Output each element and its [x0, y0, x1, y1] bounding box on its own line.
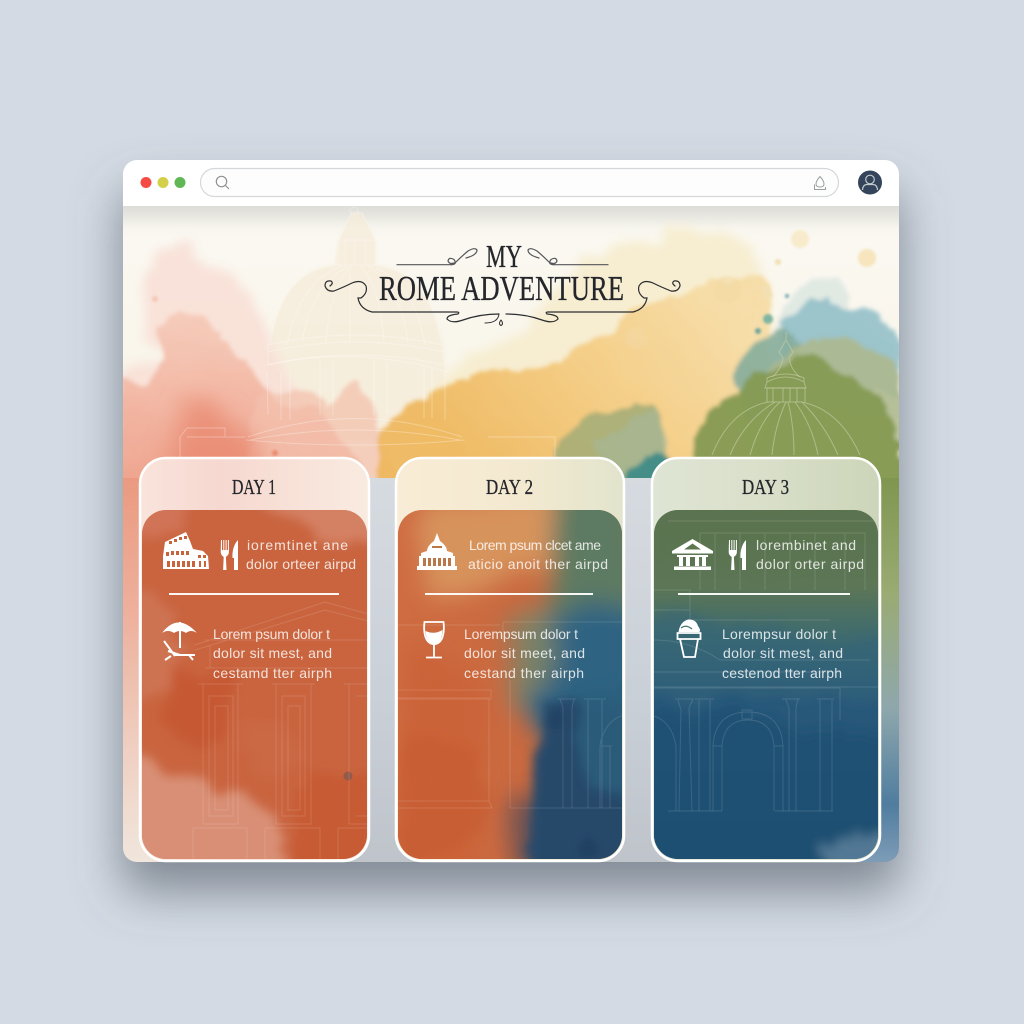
text: second activity [213, 626, 332, 681]
text: second activity: Lorem psum dolor t [213, 626, 330, 642]
card 1 header background [140, 458, 369, 861]
text: first activity [756, 537, 864, 572]
deep coral wash [164, 390, 270, 457]
icon: upload [814, 176, 826, 190]
line art: St Peter's dome [180, 207, 555, 478]
text: second activity [722, 626, 843, 681]
window control dots [140, 177, 186, 188]
card 3 painted panel [654, 510, 878, 859]
search bar [200, 168, 838, 196]
icon: basilica [417, 533, 457, 570]
divider [678, 593, 850, 595]
text: first activity [468, 537, 608, 572]
icon: search [216, 176, 229, 189]
icon: wine glass [424, 622, 444, 658]
card 1 painted panel [142, 510, 367, 859]
text: second activity: cestamd tter airph [213, 665, 332, 681]
panel: day 2 card [394, 456, 626, 862]
card 2 heading: DAY 2 [486, 475, 533, 499]
panel: day 3 card [650, 456, 882, 862]
divider [425, 593, 593, 595]
line art: green dome [712, 332, 860, 455]
text: second activity: dolor sit mest, and [723, 645, 843, 661]
browser window [120, 160, 905, 862]
pale green wash [768, 335, 899, 446]
icon: fork and knife [729, 540, 746, 570]
icon: beach umbrella and lounger [162, 622, 197, 660]
text: first activity: aticio anoit ther airpd [468, 556, 608, 572]
ornamental flourishes [325, 249, 680, 326]
pale teal wash [777, 276, 850, 327]
green left wash [552, 401, 668, 478]
blue wash [785, 303, 905, 400]
text: first activity: Lorem psum clcet ame [469, 537, 601, 553]
card 3 heading: DAY 3 [742, 475, 789, 499]
lower window area [123, 478, 899, 862]
icon: temple [672, 539, 713, 570]
line art: arches and columns [654, 521, 880, 811]
text: first activity: dolor orteer airpd [246, 556, 356, 572]
card 3 header background [652, 458, 880, 861]
text: second activity [464, 626, 585, 681]
title: ROME ADVENTURE: ROME ADVENTURE [379, 269, 624, 308]
text: first activity: ioremtinet ane [247, 537, 348, 553]
text: second activity: Lorempsur dolor t [722, 626, 836, 642]
text: first activity: lorembinet and [756, 537, 856, 553]
title block [325, 238, 680, 326]
text: first activity: dolor orter airpd [756, 556, 864, 572]
text: second activity: cestenod tter airph [722, 665, 842, 681]
teal wash [730, 326, 802, 393]
icon: ice cream cup [678, 619, 700, 657]
panel: day 1 card [138, 456, 370, 862]
orange-yellow wash [374, 273, 774, 478]
hero watercolor background [120, 206, 905, 500]
card 1 heading: DAY 1 [232, 475, 276, 499]
icon: colosseum [163, 532, 209, 569]
window shadow [122, 190, 900, 892]
divider [169, 593, 339, 595]
line art: columns and arch [398, 622, 624, 808]
paint droplets [152, 230, 876, 456]
mid salmon wash [123, 310, 361, 478]
card 2 painted panel [398, 510, 622, 859]
text: first activity [246, 537, 356, 572]
deep teal corner [624, 450, 670, 478]
line art: temple columns [193, 602, 372, 862]
card 2 header background [396, 458, 624, 861]
browser top bar [123, 160, 899, 206]
text: second activity: dolor sit mest, and [213, 645, 332, 661]
text: second activity: dolor sit meet, and [464, 645, 585, 661]
title: MY: MY [486, 238, 522, 274]
icon: fork and knife [221, 540, 238, 570]
cream dome silhouette [272, 214, 444, 428]
pale salmon wash [123, 240, 292, 394]
olive wash [690, 352, 899, 478]
text: second activity: cestand ther airph [464, 665, 584, 681]
icon: user avatar [858, 170, 882, 194]
pale yellow wash [438, 224, 775, 387]
text: second activity: Lorempsum dolor t [464, 626, 578, 642]
